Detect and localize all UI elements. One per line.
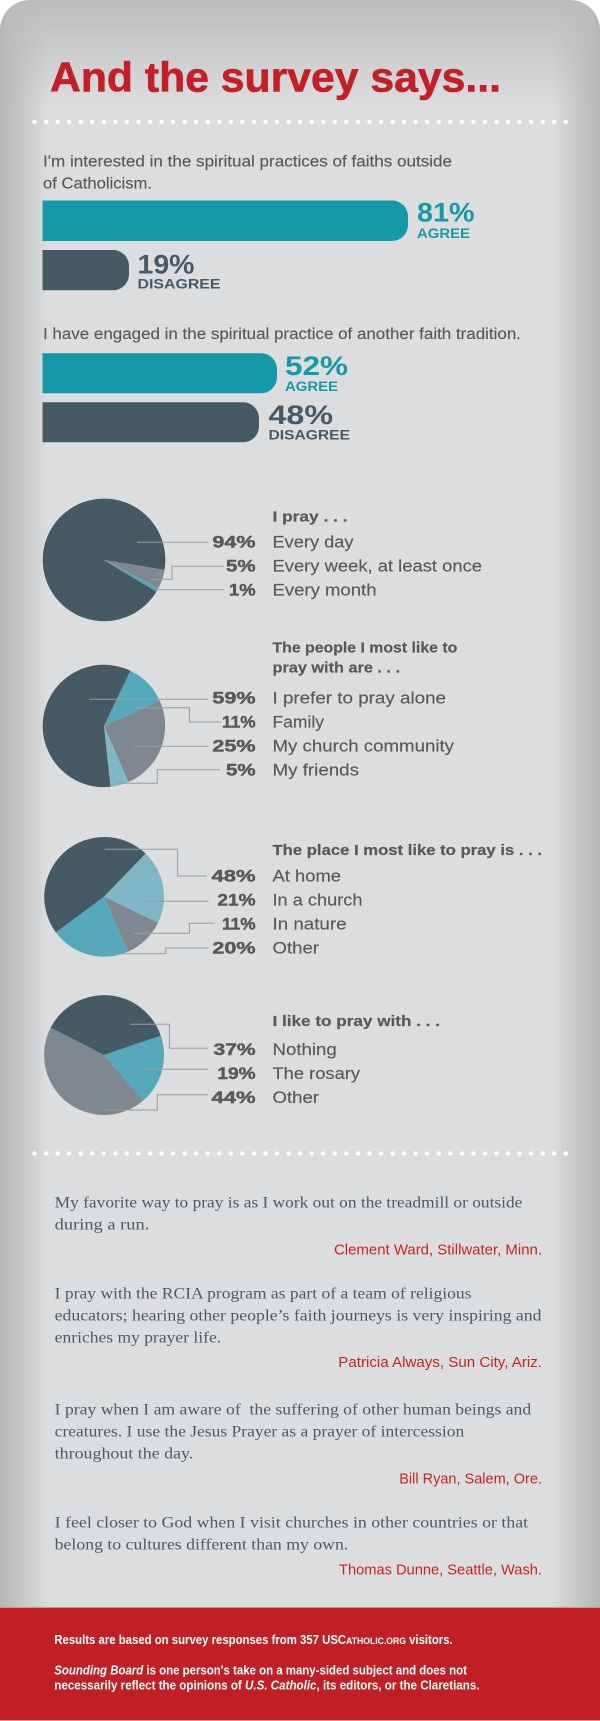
label: 19% disagree [138,249,220,292]
legend: place to pray: 48% [212,868,256,886]
legend: I pray: 5% [226,558,256,576]
quote 2: Patricia Always, Sun City, Ariz. [338,1354,542,1371]
legend: people I pray with [212,641,457,780]
legend: place to pray: In a church [272,892,362,910]
legend: people I pray with: 59% [212,690,256,708]
question 1 text: of Catholicism. [43,176,152,192]
quote 4: belong to cultures different than my own. [55,1536,348,1553]
footer text: necessarily reflect the opinions of U.S. Catholic, its editors, or the Claretians. [54,1678,480,1692]
bar: 81% agree [42,200,408,241]
pie chart: people I pray with [43,665,221,787]
legend: people I pray with: 11% [222,714,256,732]
quote 4 [55,1514,542,1578]
legend: I pray: Every day [272,534,354,552]
legend: I pray: Every week, at least once [272,558,482,576]
label: 48% disagree [268,400,350,443]
legend: I pray [212,510,482,600]
legend: place to pray: 11% [222,916,256,934]
label: 52% agree [285,351,348,394]
label: 81% agree [417,198,474,241]
legend: pray with objects: 37% [214,1041,256,1059]
legend: place to pray: 21% [217,892,256,910]
legend: place to pray: In nature [272,916,346,934]
legend: pray with objects: I like to pray with . . . [272,1014,440,1030]
legend: place to pray: Other [272,940,320,958]
legend: people I pray with: 5% [226,762,256,780]
label: 52% agree: 52% [285,351,348,381]
quote 3 [55,1401,542,1487]
footer text [54,1633,480,1692]
legend: people I pray with: My church community [272,738,455,756]
bar: 19% disagree [42,250,129,290]
footer band [0,1607,600,1721]
title: And the survey says... [50,54,501,100]
label: 19% disagree: 19% [138,249,194,279]
footer text: Results are based on survey responses from 357 USCATHOLIC.ORG visitors. [54,1633,453,1647]
legend: pray with objects: Other [272,1089,320,1107]
legend: people I pray with: pray with are . . . [272,661,400,677]
legend: pray with objects: 44% [212,1089,256,1107]
legend: I pray: Every month [272,582,376,600]
label: 48% disagree: 48% [268,400,333,430]
quote 3: throughout the day. [55,1445,193,1462]
legend: people I pray with: Family [272,714,325,732]
legend: place to pray [212,843,542,958]
quote 1: during a run. [55,1216,149,1233]
label: 48% disagree: DISAGREE [268,428,350,443]
legend: people I pray with: 25% [212,738,256,756]
bar: 52% agree [42,353,277,393]
pie chart: pray with objects [44,995,208,1115]
quote 1: Clement Ward, Stillwater, Minn. [334,1241,542,1258]
quote 2: educators; hearing other people’s faith journeys is very inspiring and [55,1307,541,1324]
quote 3: creatures. I use the Jesus Prayer as a prayer of intercession [55,1423,464,1440]
question 1 text: I'm interested in the spiritual practices of faiths outside [43,154,452,171]
question 1 text [43,154,452,192]
legend: pray with objects: Nothing [272,1041,337,1059]
legend: place to pray: The place I most like to pray is . . . [272,843,542,859]
legend: I pray: 1% [229,582,256,600]
legend: place to pray: At home [272,868,341,886]
label: 81% agree: 81% [417,198,474,228]
label: 19% disagree: DISAGREE [138,277,220,292]
legend: people I pray with: The people I most like to [272,641,457,657]
question 2 text: I have engaged in the spiritual practice of another faith tradition. [43,326,521,343]
quote 3: I pray when I am aware of the suffering of other human beings and [55,1401,531,1418]
pie chart: I pray [43,499,224,621]
legend: place to pray: 20% [212,940,256,958]
footer text: Sounding Board is one person's take on a many-sided subject and does not [54,1663,468,1677]
legend: pray with objects [212,1014,440,1107]
quote 1: My favorite way to pray is as I work out on the treadmill or outside [55,1194,522,1211]
quote 3: Bill Ryan, Salem, Ore. [399,1470,542,1487]
legend: people I pray with: My friends [272,762,359,780]
quote 1 [55,1194,542,1258]
quote 4: I feel closer to God when I visit churches in other countries or that [55,1514,529,1531]
legend: pray with objects: The rosary [272,1065,361,1083]
legend: pray with objects: 19% [217,1065,256,1083]
pie chart: place to pray [44,837,214,957]
bar: 48% disagree [42,402,259,442]
label: 81% agree: AGREE [417,226,470,241]
legend: I pray: I pray . . . [272,510,348,526]
quote 4: Thomas Dunne, Seattle, Wash. [339,1561,542,1578]
quote 2: I pray with the RCIA program as part of a team of religious [55,1285,471,1302]
quote 2: enriches my prayer life. [55,1329,221,1346]
legend: people I pray with: I prefer to pray alone [272,690,446,708]
legend: I pray: 94% [212,534,256,552]
quote 2 [55,1285,542,1371]
label: 52% agree: AGREE [285,379,338,394]
